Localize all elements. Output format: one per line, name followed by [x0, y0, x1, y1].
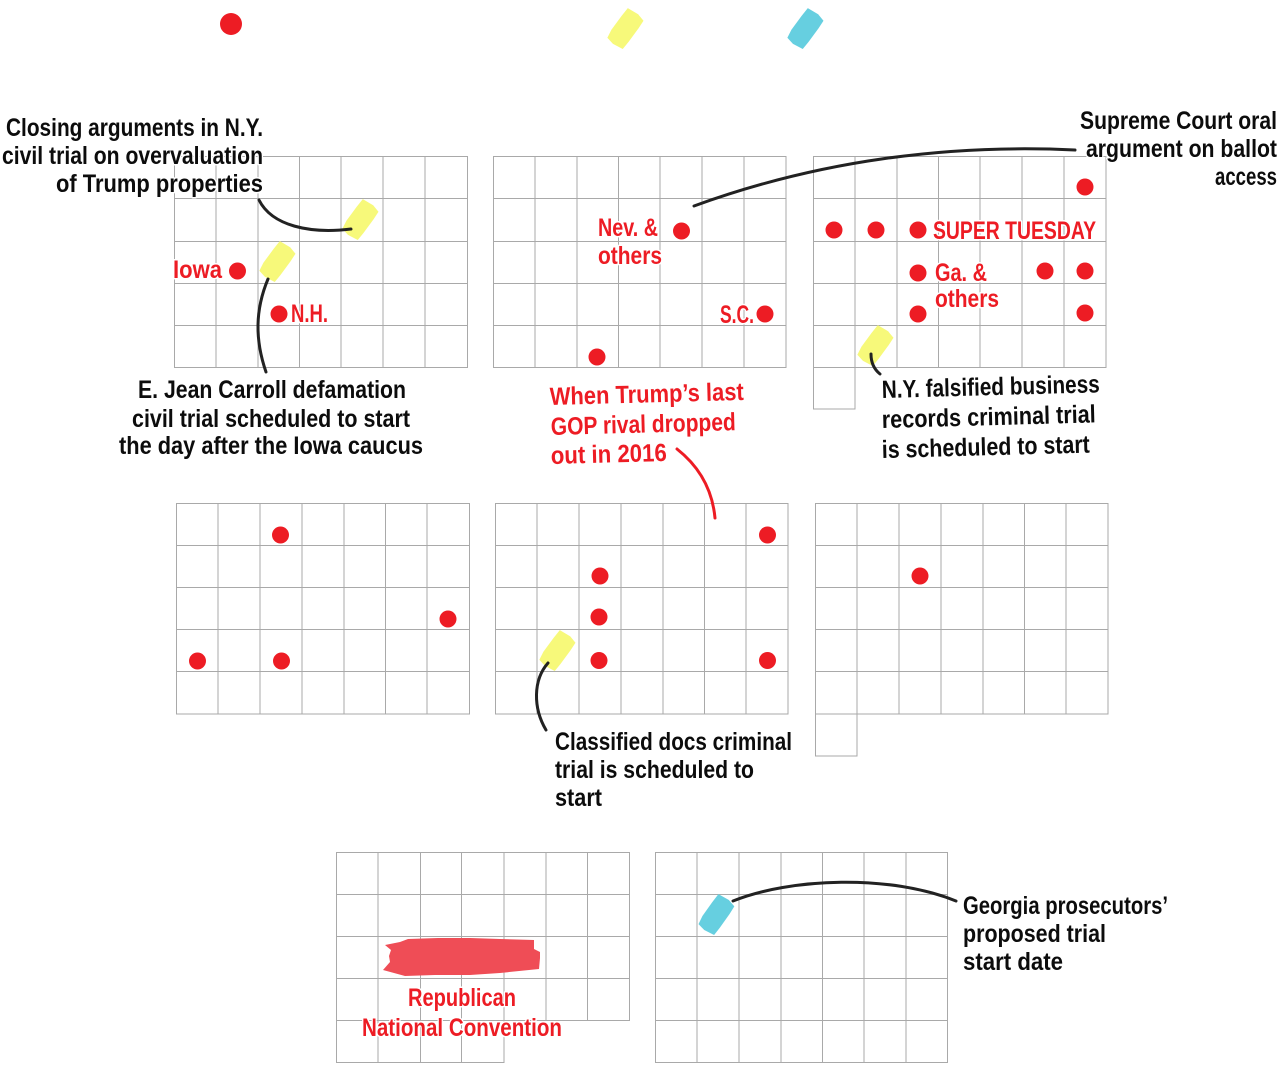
label: closing arguments: civil trial on overvaluation — [2, 142, 263, 170]
label: closing arguments: Closing arguments in N.Y. — [6, 114, 263, 142]
calendar grid 7 — [336, 852, 630, 1062]
label: Carroll trial — [119, 376, 423, 460]
label: Carroll trial: civil trial scheduled to start — [132, 405, 411, 433]
blue marker: Georgia trial — [697, 893, 736, 937]
leader line: Carroll trial — [258, 279, 268, 372]
red convention brush stroke — [383, 938, 540, 976]
label: Trump's last rival — [549, 378, 745, 470]
label: N.Y. falsified records: N.Y. falsified business — [881, 370, 1100, 404]
label: classified docs: trial is scheduled to — [555, 756, 754, 784]
calendar grid 8 — [656, 852, 948, 1062]
leader line: N.Y. falsified records — [871, 354, 880, 374]
yellow marker: overvaluation closing arguments — [340, 198, 380, 242]
label: Republican National Convention: Republican — [408, 984, 516, 1012]
label: Nev. and others: others — [598, 242, 662, 270]
label: Supreme Court — [1080, 107, 1278, 191]
label: Georgia — [963, 892, 1168, 976]
label: closing arguments — [2, 114, 263, 198]
primary dots — [189, 178, 1094, 670]
legend: red dot — [220, 13, 242, 35]
calendar grid 2 — [494, 156, 786, 368]
leader line: Georgia — [733, 882, 956, 901]
label: Trump's last rival: When Trump’s last — [549, 378, 745, 411]
label: N.Y. falsified records: is scheduled to start — [881, 431, 1091, 464]
leader line: Supreme Court — [694, 149, 1075, 206]
label: Republican National Convention: National Convention — [362, 1014, 562, 1042]
label: N.H.: N.H. — [291, 300, 328, 328]
label: N.Y. falsified records — [881, 370, 1100, 464]
calendar grid 6 — [816, 504, 1108, 756]
label: Ga. and others — [935, 259, 999, 313]
yellow marker: N.Y. falsified records trial — [855, 324, 895, 368]
label: Carroll trial: E. Jean Carroll defamation — [138, 376, 406, 404]
legend: blue marker — [785, 7, 825, 51]
label: Nev. and others: Nev. & — [598, 214, 658, 242]
label: classified docs — [555, 728, 792, 812]
label: N.Y. falsified records: records criminal trial — [881, 400, 1096, 434]
label: classified docs: Classified docs criminal — [555, 728, 792, 756]
calendar grid 5 — [496, 504, 788, 714]
yellow marker: classified docs trial — [537, 629, 577, 673]
label: classified docs: start — [555, 784, 603, 812]
calendar grid 3 — [814, 156, 1106, 409]
leader line: classified docs — [536, 663, 548, 730]
yellow marker: Carroll trial — [257, 240, 297, 284]
leader line: closing arguments — [259, 200, 351, 230]
legend: yellow marker — [605, 7, 645, 51]
label: Carroll trial: the day after the Iowa caucus — [119, 432, 423, 460]
label: Georgia: start date — [963, 948, 1063, 976]
label: Ga. and others: others — [935, 285, 999, 313]
label: Iowa: Iowa — [173, 256, 223, 284]
leader line: Trump's last rival — [677, 449, 715, 518]
label: Georgia: proposed trial — [963, 920, 1106, 948]
label: closing arguments: of Trump properties — [56, 170, 263, 198]
label: Ga. and others: Ga. & — [935, 259, 987, 287]
label: Georgia: Georgia prosecutors’ — [963, 892, 1168, 920]
label: Trump's last rival: GOP rival dropped — [550, 408, 736, 441]
label: Republican National Convention — [362, 984, 562, 1042]
label: S.C.: S.C. — [720, 301, 754, 329]
label: Nev. and others — [598, 214, 662, 270]
calendar grid 4 — [176, 504, 470, 714]
label: Super Tuesday: SUPER TUESDAY — [933, 217, 1096, 245]
label: Trump's last rival: out in 2016 — [550, 439, 667, 470]
calendar grid 1 — [174, 156, 468, 368]
